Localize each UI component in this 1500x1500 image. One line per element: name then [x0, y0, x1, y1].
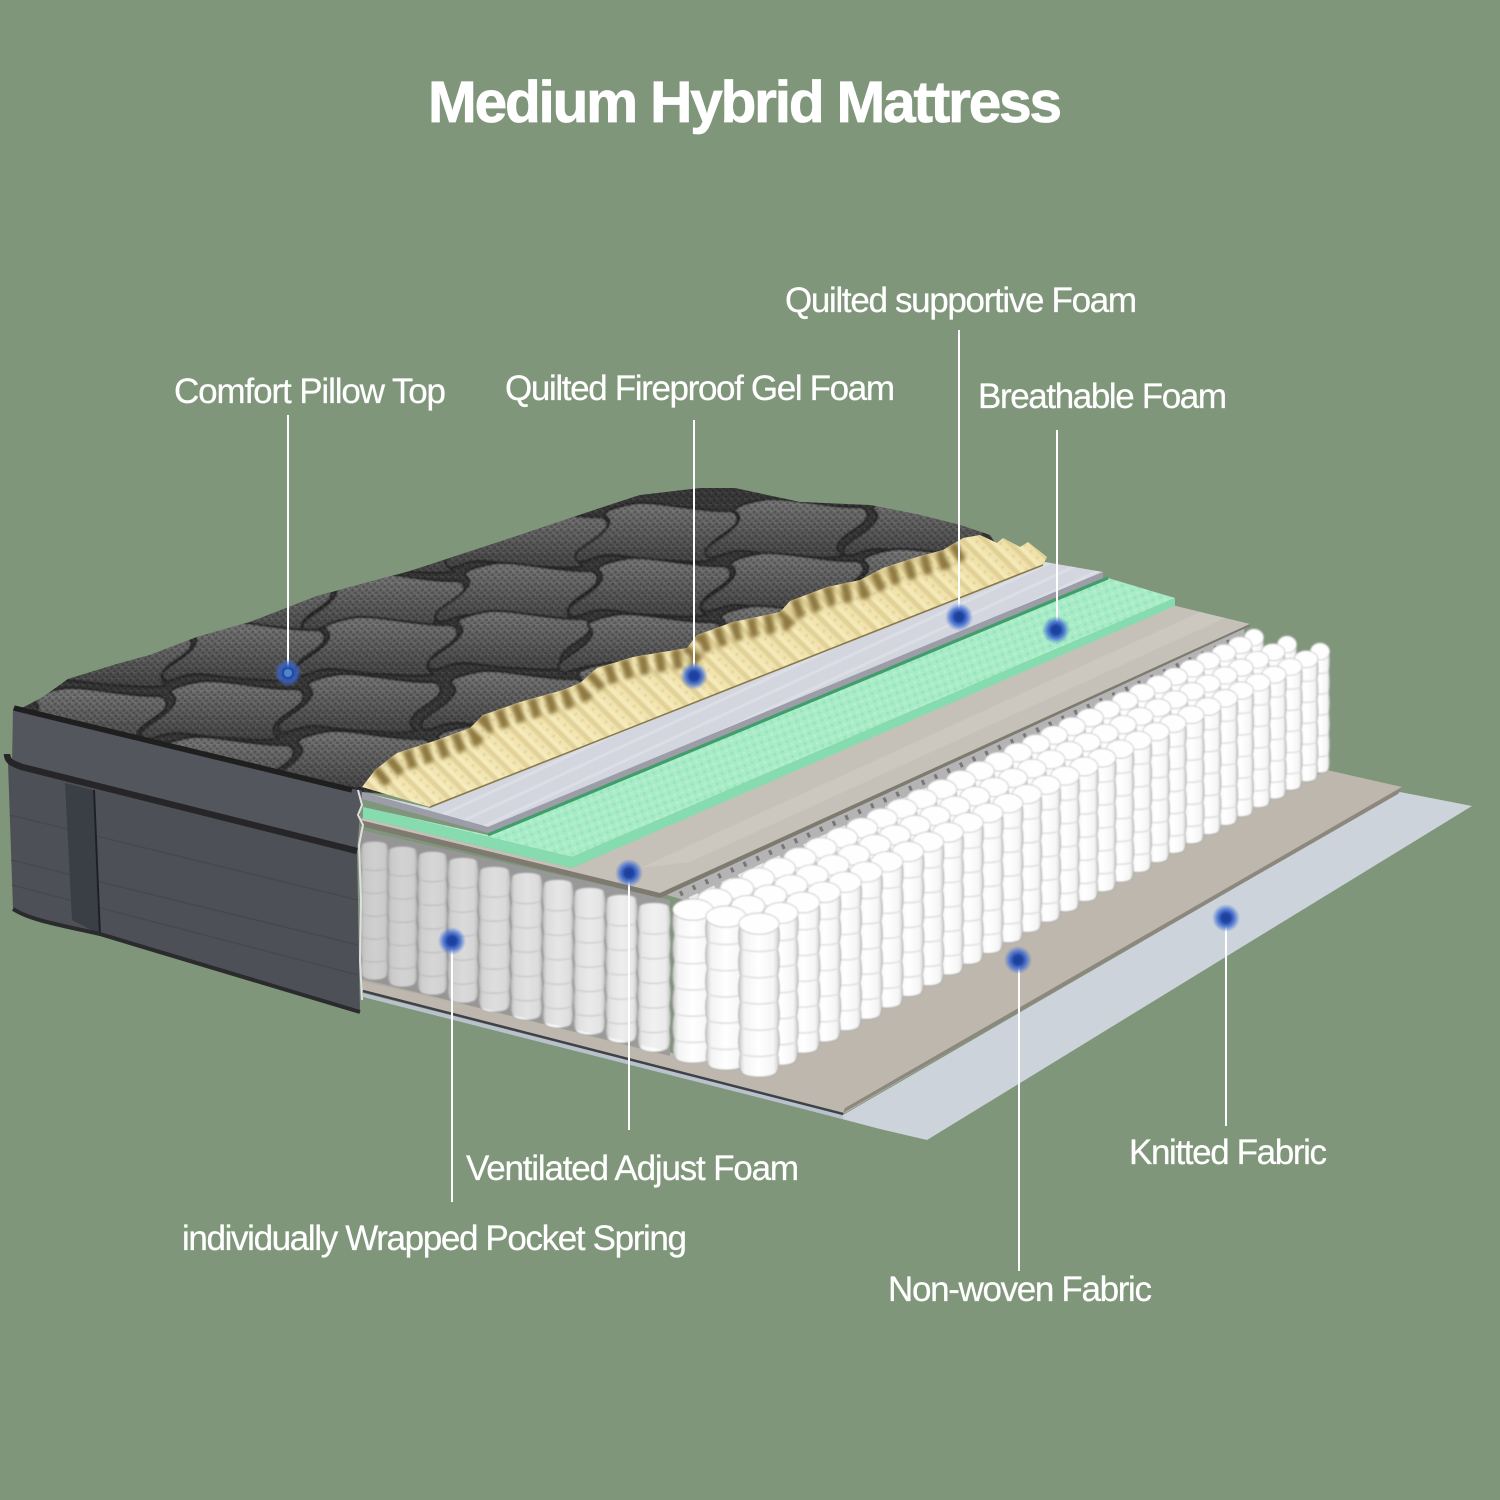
layer: comfort pillow top: [23, 488, 994, 794]
callout: Quilted Fireproof Gel Foam: Quilted Fireproof Gel Foam: [505, 369, 895, 408]
callout: Knitted Fabric: Knitted Fabric: [1129, 1133, 1327, 1172]
layer: ventilated adjust foam: [360, 605, 1250, 898]
layer: side coils dark backing: [360, 830, 670, 1056]
callout: Knitted Fabric: [1129, 904, 1327, 1172]
layer: non-woven fabric base: [362, 770, 1402, 1114]
layer: quilted supportive foam: [362, 562, 1103, 833]
callout: Ventilated Adjust Foam: Ventilated Adjust Foam: [466, 1149, 799, 1188]
callout: Ventilated Adjust Foam: [466, 859, 799, 1188]
callout: Breathable Foam: Breathable Foam: [978, 377, 1227, 416]
callout: Non-woven Fabric: Non-woven Fabric: [888, 1270, 1152, 1309]
layer: knitted fabric base: [363, 792, 1472, 1140]
side panel vertical strap: [65, 783, 99, 934]
mattress cross-section illustration: [0, 480, 1472, 1140]
callout: Quilted Fireproof Gel Foam: [505, 369, 895, 690]
callout: individually Wrapped Pocket Spring: [182, 927, 687, 1258]
layer: quilted fireproof gel foam: [362, 535, 1047, 808]
layer: pocket spring block: [673, 629, 1330, 1077]
layer: exposed spring band: [664, 628, 1246, 905]
layer: breathable foam: [363, 578, 1175, 868]
layer: front face pocket springs: [360, 830, 670, 1052]
callout: Comfort Pillow Top: [174, 372, 446, 687]
side panel piping: [14, 708, 352, 790]
callout: Quilted supportive Foam: [785, 281, 1137, 631]
callout: Breathable Foam: [978, 377, 1227, 644]
callout: Non-woven Fabric: [888, 946, 1152, 1309]
layer: side panel of mattress cover: [7, 708, 363, 1012]
callout: individually Wrapped Pocket Spring: individually Wrapped Pocket Spring: [182, 1219, 687, 1258]
title: Medium Hybrid Mattress: [428, 70, 1062, 135]
callout: Quilted supportive Foam: Quilted supportive Foam: [785, 281, 1137, 320]
callout: Comfort Pillow Top: Comfort Pillow Top: [174, 372, 446, 411]
